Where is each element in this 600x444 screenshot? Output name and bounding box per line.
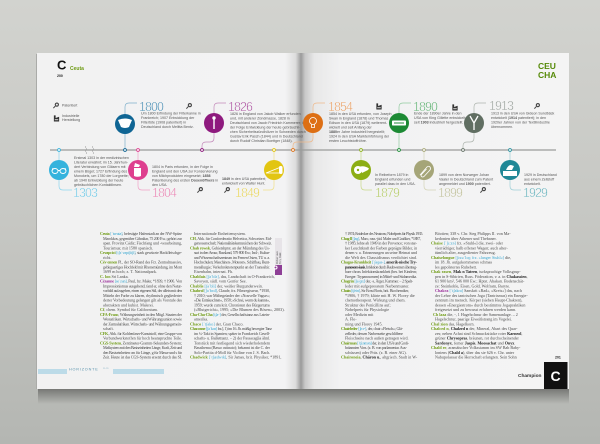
- text column 3: Chagas-Krankheit [ˈʃaɡas-], amerik-nische Try-: [341, 260, 418, 266]
- footer left: Horizonte: [38, 366, 164, 374]
- text column 4: freigesetzt und zu bewusst erfahren werden kann.: [435, 307, 516, 312]
- legend: [53, 103, 80, 122]
- event 1854: 1924 in den USA Markteinführung der: [329, 134, 390, 138]
- text column 4: ze: Steinkohle, Eisen, Gold, Wolfram, Baryte.: [435, 283, 510, 289]
- page header right: CEU: [538, 61, 556, 71]
- event 1826: chen Sicherheitszündhölzer in Schweden durch: [230, 130, 306, 134]
- text column 2: »Die Enttäuschten«, 1958; »Schrei, wenn du kannst«,: [194, 298, 270, 304]
- event 1890: [389, 100, 466, 151]
- page header right: CHA: [538, 70, 556, 80]
- icon: factory: [452, 104, 458, 110]
- footer left: Horizonte: HORIZONTE: [69, 368, 99, 372]
- event 1800: Deutschland durch Melitta Bentz.: [141, 125, 194, 129]
- event 1849: entwickelt von Walter Hunt.: [222, 182, 265, 186]
- panel tab: purple marker: Ocker aus: [275, 251, 279, 264]
- event 1929: aus einem Zellstoff: [524, 178, 554, 182]
- text column 4: loniens (Chald a), über das sie 626 v. Chr. unter: [435, 350, 515, 356]
- footer right: page tab: C: [550, 368, 561, 384]
- text column 2: Cha-Cha-Cha [tʃa-] der, Gesellschaftstanz aus Latein-: [190, 312, 271, 318]
- text column 1: Impressionismus ausgehend, fand er, ohne den Natur-: [103, 283, 183, 289]
- text column 3: [341, 231, 423, 360]
- event 1890: 1890: [413, 100, 438, 114]
- icon: patent: [224, 187, 230, 193]
- event 1804: 1804 in Paris erfunden, in der Folge in: [152, 165, 213, 169]
- text column 4: [431, 231, 528, 360]
- panel tab: purple marker: [274, 238, 282, 275]
- event 1854: wickelt und seit Anfang der: [329, 126, 373, 130]
- event 1303: ab 1940 Entwicklung der heute: [74, 178, 123, 182]
- footer right: page tab: 201: [555, 356, 561, 360]
- text column 4: Sardonyx, ferner Jaspis, Moosachat und Onyx.: [435, 340, 515, 346]
- event 1899: Vaaler in Deutschland zum Patent: [439, 178, 493, 182]
- text column 2: Hochschulen; Maschinen-, Motoren-, Schiffbau, Bunt-: [194, 260, 271, 266]
- text column 2: amerika.: [194, 316, 208, 322]
- text column 1: Ceuta [ˈtseuta], befestigte Hafenstadt an der NW-Spitze: [100, 231, 182, 237]
- text column 2: Chablais [ʃaˈblɛ], das, Landschaft in O-Frankreich,: [190, 274, 275, 280]
- event 1849: 1849: [235, 186, 260, 200]
- text column 1: CFA-Franc, Währungseinheit in den Mitgl. Staaten der: [100, 312, 183, 318]
- event 1929: entwickelt.: [524, 182, 541, 186]
- event 1929: 1929 in Deutschland: [524, 173, 557, 177]
- text column 1: Cév ennen Pl., der SO-Rand des Frz. Zentralmassivs,: [100, 260, 182, 266]
- icon: patent: [197, 187, 203, 193]
- event 1826: [186, 100, 306, 151]
- text column 1: Cevapcici [tʃɛˈvaptʃitʃi], stark gewürzte Hackfleischge-: [100, 250, 183, 256]
- event 1854: 1854 in den USA erfunden, von Joseph: [329, 112, 392, 116]
- event 1890: seit 1903 industriell hergestellt.: [414, 120, 463, 124]
- text column 2: Chaconne [ʃaˈkɔn] frz.], 1) im 16. Jh. mäßig bewegter Tanz: [190, 326, 272, 332]
- page header left: 200: [57, 74, 63, 78]
- text column 1: abstrakten und kubist. Malerei.: [103, 302, 154, 307]
- text column 2: suri in den Amur, Russland, 579 800 Ew.; Ind.-, Kultur-: [194, 250, 271, 256]
- text column 4: zentrum im mensch. Körper (sieben Haupt-Chakren),: [435, 298, 522, 304]
- text column 4: pen in S-Sibirien, Russ. Föderation, v. a. in Chakassien,: [435, 274, 528, 280]
- event 1913: entwickelt (1914 patentiert); in den: [491, 116, 546, 120]
- text column 3: zelleder, dessen Narbenseite geschliffene: [345, 331, 403, 337]
- text column 2: CH, Abk. für Confoederatio Helvetica, Schweizer. Eid-: [190, 236, 273, 242]
- event 1899: angemeldet und 1900 patentiert.: [439, 182, 491, 186]
- legend: Herstellung: [62, 118, 80, 122]
- event 1913: [462, 99, 555, 151]
- event 1879: In Reibeform 1879 in: [375, 173, 408, 177]
- text column 1: CFK, Abk. für Kohlenfaser-Kunststoff, eine Gruppe von: [100, 331, 182, 337]
- icon: paper clip: [420, 166, 430, 177]
- text column 3: A. Fle-: [345, 316, 357, 322]
- text column 4: Chalced n, Chalzed n der, Mineral, Abart des Quar-: [431, 326, 518, 332]
- text column 3: schüssen) oder Präs. (z. B. einer AG).: [345, 350, 407, 355]
- text column 1: Verbundwerkstoffen für hoch beanspruchte Teile.: [103, 336, 182, 340]
- event 1879: England erfunden und: [375, 178, 410, 182]
- text column 3: panosom-iasis, Infektion durch Raubwanzen übertrag-: [345, 264, 418, 270]
- text column 1: vorbild aufzugeben, einen eigenen Stil, der allein mit den: [103, 288, 182, 294]
- text column 4: tümlich alter, ausgedienter Fahrzeug.: [435, 250, 496, 256]
- text column 3: bare chron. Infektionskrankheit (bes. bei Kindern;: [345, 269, 417, 274]
- text column 3: Erreger: Trypanosomen) in Mittel- und Südamerika.: [345, 274, 417, 279]
- icon: razor blade: [392, 120, 406, 126]
- text column 2: Eisenbahn, internat. Fh.: [194, 269, 233, 275]
- text column 2: Solo-Partita d-Moll für Violine von J. S. Bach.: [194, 350, 270, 355]
- event 1913: 1913 in den USA von Gideon Sundbäck: [491, 112, 555, 116]
- text column 4: Chal zion das, Hagelkorn.: [431, 321, 475, 327]
- text column 2: 1959; wurde zum krit. Chronisten des Bürgertums: [194, 302, 270, 307]
- icon: coffee filter: [118, 118, 132, 128]
- text column 3: britannien Vors. (z. B. von parlamentar. Aus-: [345, 345, 408, 350]
- event 1826: und, mit anderer Zündmasse, 1828 in: [230, 116, 290, 120]
- event 1854: [292, 100, 392, 151]
- text column 2: (»Blutgericht«, 1995; »Die Blumen des Bösen«, 2003).: [194, 307, 285, 313]
- text column 4: Chak rasen, Mak n Tatren, turksprachige Volksgrup-: [431, 269, 521, 275]
- event 1854: 1880er Jahre industriell hergestellt;: [329, 130, 385, 134]
- event 1854: 1854: [328, 100, 353, 114]
- text column 2: Chab rowsk, Gebietshptst. an der Mündung des Us-: [190, 245, 271, 251]
- text column 2: metallurgie; Verkehrsknotenpunkt an der Transsibir.: [194, 264, 270, 269]
- event 1804: England und den USA zur Konservierung: [152, 170, 218, 174]
- event 1913: übernommen.: [491, 125, 513, 129]
- icon: tissue box: [503, 165, 517, 176]
- text column 1: [100, 231, 183, 360]
- event 1854: Edison in den USA (1879) weiterent-: [329, 121, 388, 125]
- text column 2: Internationale Einheitensystem.: [194, 231, 246, 236]
- event 1303: Erstmal 1303 in der medizinischen: [74, 156, 129, 160]
- text column 3: denen v. a. Erinnerungen an seine Heimat und: [345, 250, 417, 255]
- text column 3: oder Medizin mit: [345, 312, 374, 317]
- text column 1: CGS-System, Zentimeter-Gramm-Sekunden-System;: [100, 340, 182, 346]
- text column 1: der Zentralafrikan. Wirtschafts- und Währungsgemein-: [103, 321, 183, 326]
- event 1899: 1899 von dem Norweger Johan: [439, 173, 489, 177]
- event 1899: [414, 149, 493, 200]
- event 1913: 1913: [489, 99, 514, 113]
- event 1849: [222, 149, 284, 200]
- text column 2: und Wissenschaftszentrum im Fernen Osten, TU u. a.: [194, 255, 270, 261]
- event 1800: Um 1800 Erfindung der Filterkanne in: [141, 112, 201, 116]
- text column 2: Bassthema (Basso ostinato); bekannt ist die C. der: [194, 345, 271, 350]
- icon: patent: [534, 103, 540, 109]
- text column 1: Westafrikan. Wirtschafts- und Währungsunion sowie: [103, 316, 182, 322]
- text column 4: Chaiselongue [ʃɛzəˈlɔŋ; frz. »langer Stuhl«] die,: [431, 255, 511, 261]
- text column 1: gebirgsartiges Hochfeld mit Rhonemündung, im Mont: [103, 264, 183, 270]
- event 1804: von Milchprodukten eingesetzt; 1858: [152, 174, 211, 178]
- text column 2: schafts- u. Balletttanz. – 2) der Passacaglia ähnl.: [194, 336, 270, 340]
- text column 1: richt.: [103, 255, 112, 260]
- text column 3: Chag ll [ʃaɡ], Marc, russ.-jüd. Maler und Grafiker, *1887,: [341, 236, 421, 242]
- text column 3: Chairleder [ʃɛːr-], der, chair »Fleisch«; Glä-: [341, 326, 404, 332]
- icon: adhesive tape roll: [354, 166, 369, 174]
- text column 4: 61 900 km², 546 000 Ew.; Hptst. Abakan. Bodenschät-: [435, 278, 525, 284]
- text column 1: Cf, chem. Symbol für Californium.: [100, 307, 158, 313]
- event 1804: [128, 149, 218, 200]
- event 1879: 1879: [375, 186, 400, 200]
- event 1804: 1804: [152, 186, 177, 200]
- event 1800: Frankreich; 1907 Entwicklung der: [141, 116, 195, 120]
- event 1899: 1899: [438, 186, 463, 200]
- icon: light bulb: [310, 118, 316, 128]
- text column 2: [190, 231, 285, 360]
- text column 4: Hagelschnur, paarige Eiweißstrang im Vogelei.: [435, 316, 512, 322]
- event 1804: Patentierung des ersten Dosenöffners in: [152, 178, 218, 182]
- text column 1: Maßsystem mit den Basiseinheiten Länge, Kraft, Zeit und: [103, 345, 182, 351]
- text column 1: Cézanne [seˈzan], Paul, frz. Maler, *1839, † 1906. Von: [100, 278, 182, 284]
- icon: glasses: [52, 168, 66, 174]
- page header right: [538, 61, 556, 80]
- page header left: C: [57, 58, 67, 72]
- icon: patent: [186, 103, 192, 109]
- text column 1: Tourismus; mit 1580 spanisch.: [103, 245, 153, 250]
- event 1826: Gustav Erik Pasch (1844) und in Deutschland: [230, 134, 303, 138]
- text column 2: Savoyen, südl. vom Genfer See.: [194, 278, 247, 284]
- text column 3: ming und Florey 1945.: [345, 321, 383, 326]
- event 1929: [500, 149, 557, 200]
- text column 1: schaft.: [103, 326, 114, 331]
- text column 3: Chagrin [ʃaˈɡrɛ̃] der, -s, Ärger, Kummer. – 2 Spalt-: [341, 278, 414, 284]
- text column 4: dessen »Energiestrom« durch bestimmte Jogapraktiken: [435, 302, 525, 307]
- event 1879: [351, 149, 416, 200]
- text column 1: Marokkos, gegenüber Gibraltar, 75 200 Ew.; gehört zur: [103, 236, 183, 242]
- legend: Patentiert: [62, 104, 77, 108]
- event 1890: USA von King Gillette entwickelt;: [414, 116, 466, 120]
- event 1826: 1826 in England von Jakob Walker erfunden: [230, 112, 301, 116]
- text column 3: die Welt des Chassidismus verdichtet sind.: [345, 255, 417, 260]
- event 1303: 1303: [73, 186, 98, 200]
- panel tab: purple marker: Ton, Kalk: [278, 252, 282, 264]
- text column 2: genossenschaft; Nationalitätskennzeichen der Schweiz.: [194, 240, 272, 246]
- icon: tin can: [134, 168, 141, 177]
- text column 1: C. lon Sri Lanka.: [100, 274, 129, 279]
- event 1800: 1800: [139, 100, 164, 114]
- text column 3: Chain [tʃein], Sir Ernst Boris, brit. Biochemiker,: [341, 288, 409, 294]
- event 1913: 1920er Jahren von der Textilindustrie: [491, 120, 550, 124]
- text column 4: Ch laza die, -, 1 Hagelschnur der Samenanlage. – 2: [433, 312, 518, 318]
- event 1804: den USA.: [152, 183, 167, 187]
- legend: Industrielle: [62, 114, 79, 118]
- text column 3: Nobelpreis für Physiologie: [345, 307, 389, 312]
- panel: book spread: [36, 53, 569, 389]
- event 1826: der Folge Entwicklung der heute gebräuchli-: [230, 126, 301, 130]
- event 1879: parallel dazu in den USA.: [375, 182, 416, 186]
- text column 3: Chairman [ˈtʃɛəmən] der, in den USA und Groß-: [341, 340, 410, 346]
- text column 4: im 18. Jh. aufgekommenes schmas: [435, 260, 492, 264]
- text column 2: im ¾-Takt in Spanien; später in Frankreich Gesell-: [194, 331, 271, 336]
- event 1890: Ende der 1890er Jahre in den: [414, 112, 462, 116]
- event 1303: [49, 149, 129, 200]
- text column 3: leder mit aufgepresstem Narbenmuster.: [345, 283, 409, 288]
- icon: safety pin: [266, 167, 281, 173]
- text column 3: Struktur des Penicillins auf;: [345, 302, 391, 307]
- footer right: page tab: Champion: [518, 373, 542, 379]
- text column 3: Chaironeia, Chäron u., altgriech. Stadt in W-: [341, 354, 418, 360]
- text column 2: † 2010; war Mitbegründer der »Nouvelle Vague«;: [194, 293, 270, 298]
- text column 2: Chablis [ʃaˈbli] der, weißer Burgunderwein.: [190, 283, 263, 289]
- page header left: Ceuta: [70, 66, 84, 72]
- event 1303: dert Verbindung von Gläsern mit: [74, 165, 126, 169]
- text column 3: † 1974; Entdecker des Neutrons; Nobelpreis für Physik 1935.: [345, 231, 423, 236]
- event 1800: Filtertüte (1908 patentiert) in: [141, 120, 186, 124]
- icon: patent: [480, 187, 486, 193]
- event 1303: Monokels, um 1780 der Lorgnette;: [74, 174, 129, 178]
- event 1854: ersten Leuchtstoffröhre.: [329, 139, 367, 143]
- event 1826: Deutschland von Jacob Friedrich Kammerer; in: [230, 121, 305, 125]
- text column 4: Chakra [ˈtʃakra] Sanskrit »Rad«, »Kreis«] das, nach: [435, 288, 522, 294]
- text column 3: *1906, † 1979; klärte mit H. W. Florey die: [345, 293, 415, 299]
- text column 2: Chabrol [ʃaˈbrɔl], Claude, frz. Filmregisseur, *1930,: [190, 288, 270, 294]
- icon: match: [212, 116, 216, 129]
- text column 1: span. Provinz Cádiz; Fischfang und -verarbeitung,: [103, 240, 182, 246]
- event 1826: 1826: [228, 100, 253, 114]
- text column 4: les gepolstertes Ruhebett.: [435, 264, 477, 269]
- event 1303: einem Bügel; 1727 Erfindung des: [74, 170, 127, 174]
- footer right: page tab: [518, 356, 568, 389]
- text column 4: zes; neben Achat sind Schmuckstücke roter Karneol,: [435, 331, 522, 337]
- text column 2: Chaco [ˈtʃako] der, Gran Chaco.: [190, 321, 244, 327]
- text column 3: chemotherapeut. Wirkung und chem.: [345, 298, 406, 302]
- event 1826: durch Rudolf Christian Boettger (1848).: [230, 139, 293, 143]
- text column 4: grüner Chrysopras, bräunen, rot durchscheinender: [435, 336, 520, 342]
- text column 4: der Lehre des tantrischen Joga (Tantrismus) ein Energie-: [435, 293, 528, 298]
- event 1849: 1849 in den USA patentiert;: [222, 177, 266, 181]
- text column 3: † 1985; lebte ab 1949 in der Provence; von star-: [345, 240, 418, 246]
- event 1929: 1929: [523, 186, 548, 200]
- text column 1: Mitteln der Farbe zu klaren, rhythmisch gegliederter: [103, 293, 183, 299]
- timeline axis: [50, 146, 556, 154]
- text column 4: Chaise [ˈʃɛːzə] frz. »Stuhl«] die, zwei- oder: [431, 240, 504, 246]
- event 1854: Swan in England (1878) und Thomas: [329, 116, 388, 120]
- text column 4: Chald er, aramäischer Volksstamm im SW Bab Baby-: [431, 345, 521, 351]
- book shadow: [38, 389, 569, 404]
- text column 4: Böotien; 338 v. Chr. Sieg Philipps II. von Ma-: [435, 231, 511, 236]
- text column 1: 1699 m hoch; z. T. Nationalpark.: [103, 269, 157, 274]
- text column 3: Fleischseite nach außen getragen wird.: [345, 336, 409, 340]
- icon: factory: [376, 103, 382, 110]
- icon: zipper: [470, 116, 478, 130]
- event 1303: gebräuchlichen Kontaktlinsen.: [74, 183, 122, 187]
- event 1800: [115, 100, 201, 151]
- event 1303: Literatur erwähnt; im 15. Jahrhun-: [74, 160, 129, 164]
- text column 4: vierrädriger, halb offener Wagen; auch alter-: [435, 245, 508, 251]
- text column 4: Nabupolassar die Herrschaft erlangten. Sein Sohn: [435, 354, 517, 360]
- text column 1: Zeit. Heute ist das CGS-System ersetzt durch das SI.: [103, 354, 182, 360]
- text column 3: ker Leuchtkraft der Farben geprägte Bilder, in: [345, 245, 417, 251]
- text column 2: Chadwick [ˈtʃædwɪk], Sir James, brit. Physiker, *1891,: [190, 354, 281, 360]
- page header left: [57, 58, 84, 78]
- footer left: Horizonte: A–G: [103, 366, 109, 370]
- text column 1: derter Vorbedeutung gelangen gilt als Vorstufe des: [103, 298, 182, 302]
- text column 1: den Basiseinheiten cm für Länge, g für Masse und s für: [103, 350, 183, 356]
- text column 4: kedonien über Athener und Thebaner.: [435, 236, 497, 241]
- text column 2: Tonstück mit festliegend sich wiederholendem: [194, 340, 271, 345]
